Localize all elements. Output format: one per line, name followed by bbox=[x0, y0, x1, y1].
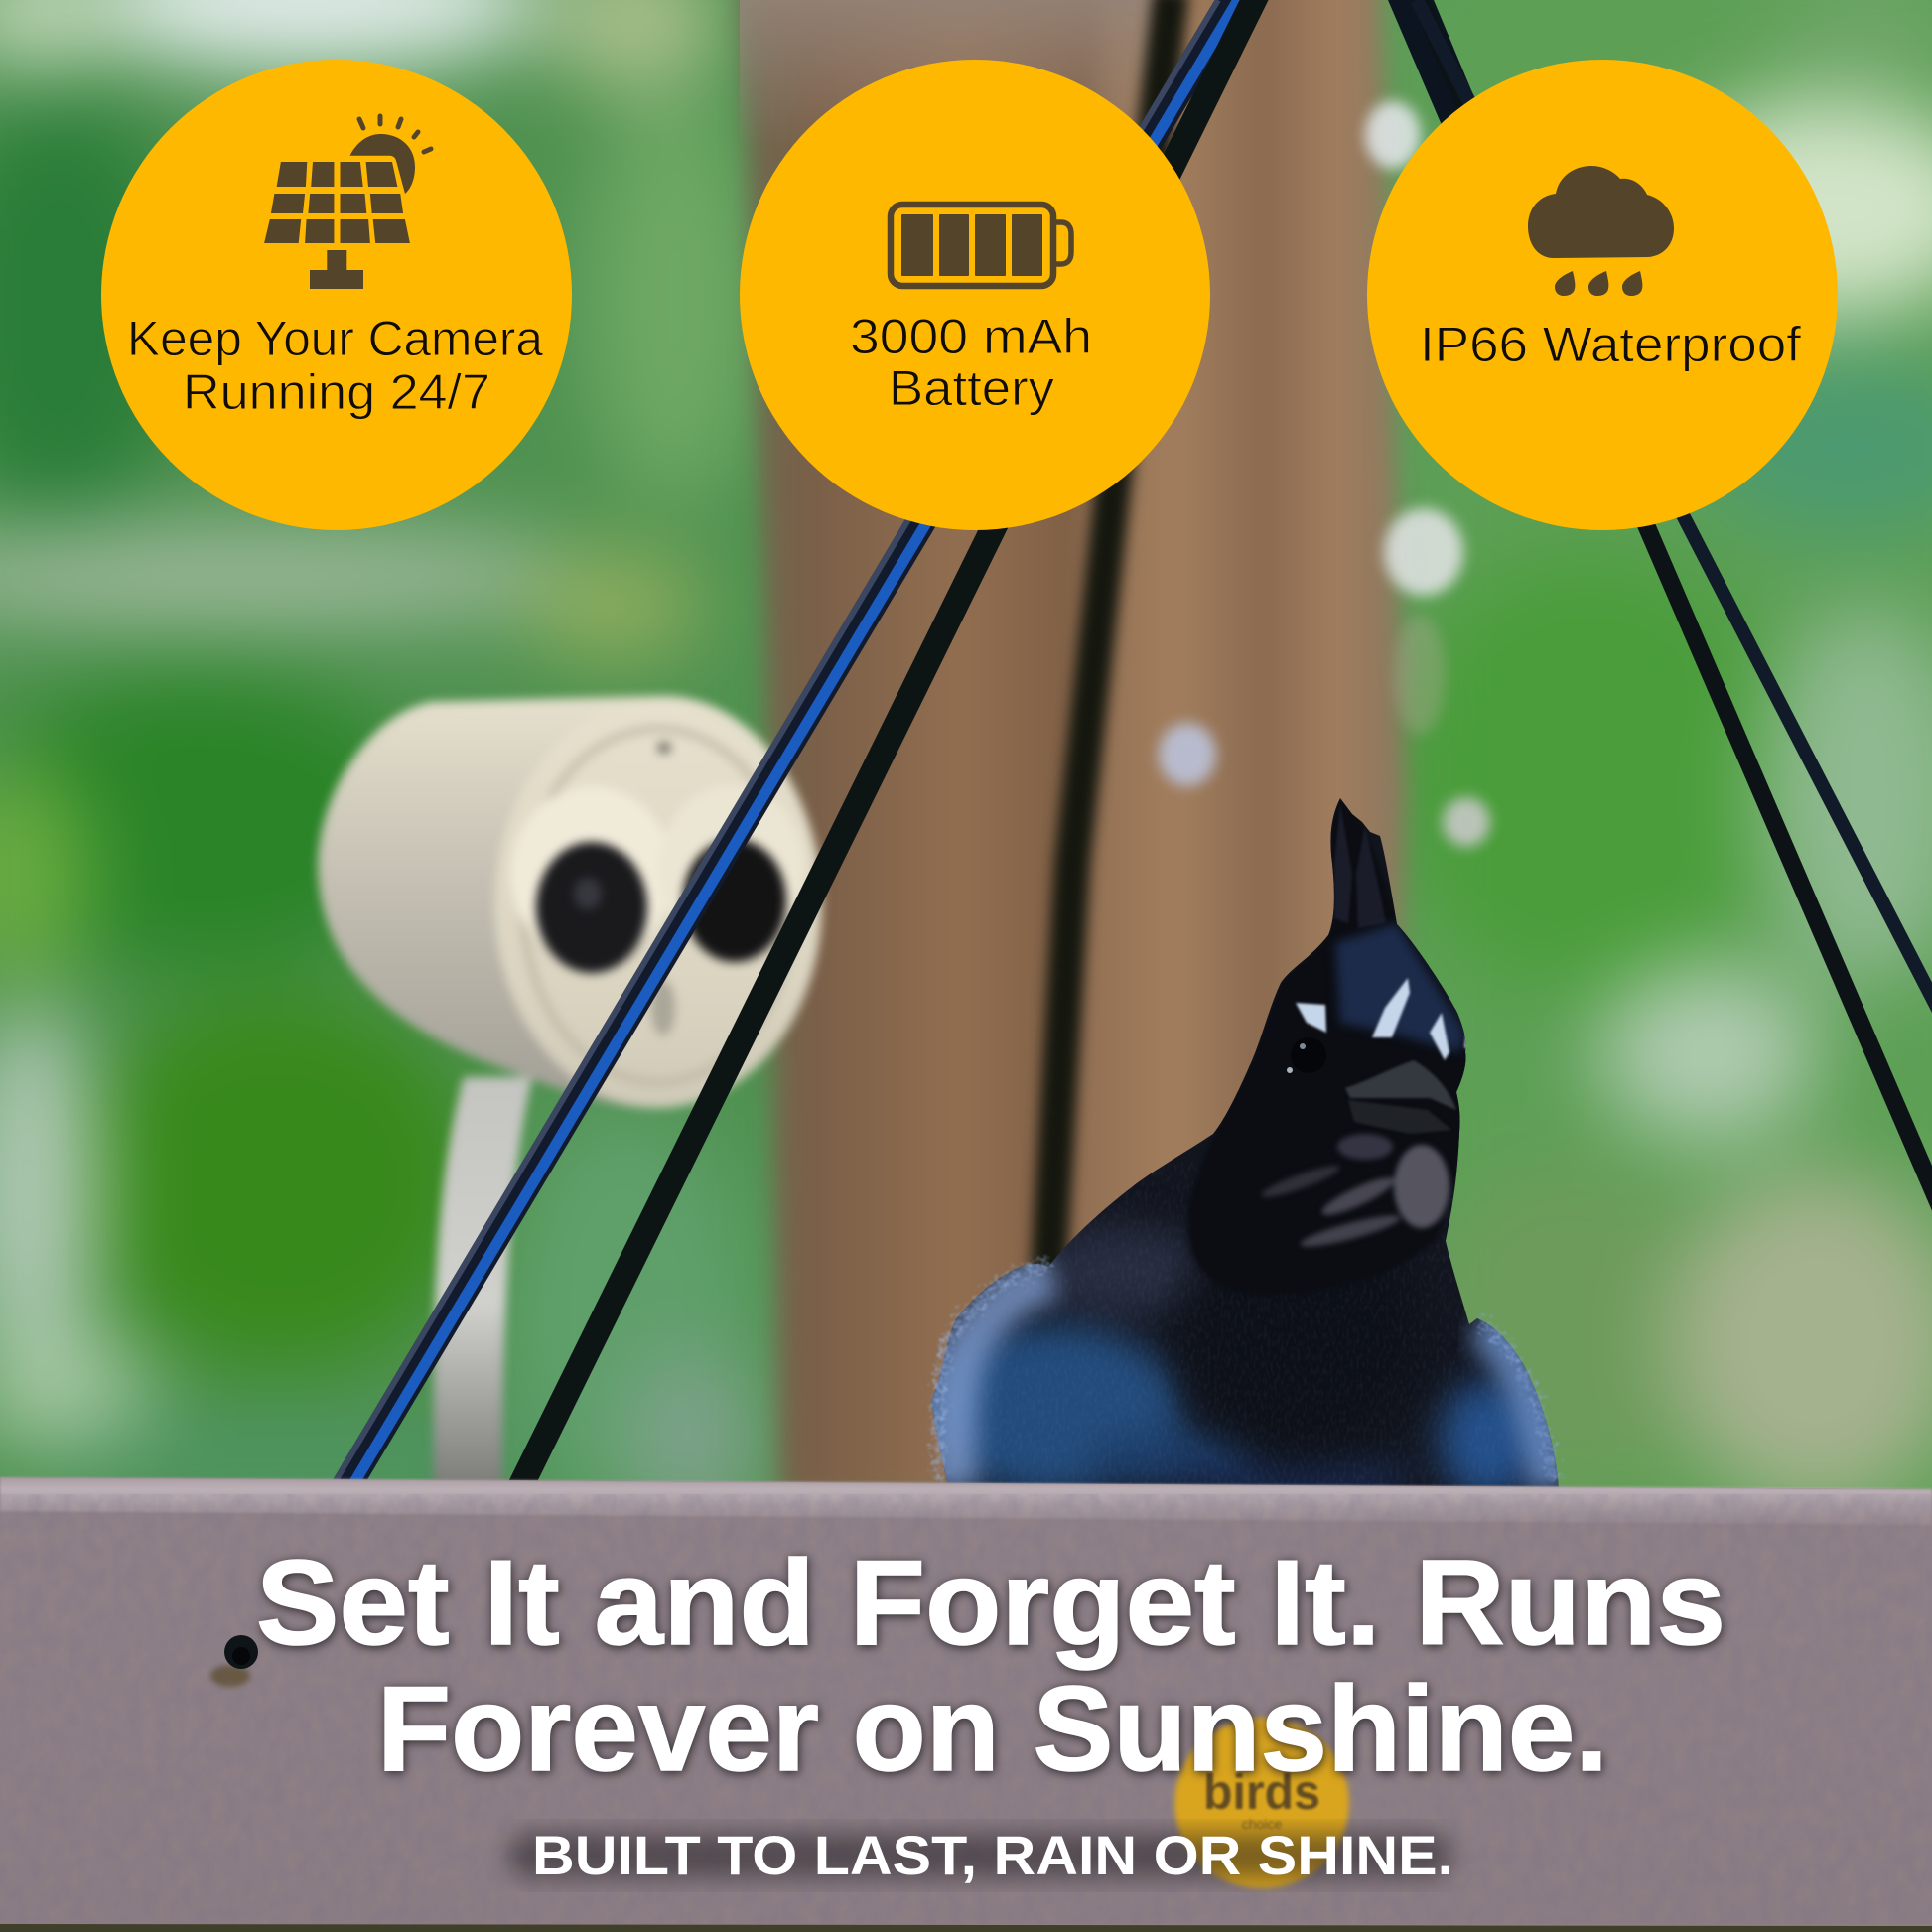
badge: solar bbox=[101, 60, 572, 530]
birds logo sticker: choice bbox=[1242, 1816, 1282, 1832]
subheading: BUILT TO LAST, RAIN OR SHINE. bbox=[532, 1824, 1453, 1886]
bird eye bbox=[1287, 1037, 1326, 1073]
bird left fluff hairs bbox=[938, 1263, 1048, 1481]
camera right lens bbox=[683, 839, 786, 962]
bar noise texture bbox=[0, 1494, 1932, 1924]
bird beak bbox=[1345, 1060, 1456, 1134]
bird chest shadow bbox=[1170, 1258, 1344, 1473]
bird body plumage bbox=[923, 1226, 1539, 1499]
bird right fluff hairs bbox=[1481, 1322, 1555, 1481]
bird forehead marks bbox=[1296, 978, 1471, 1060]
badge text: solar: Keep Your Camera bbox=[127, 311, 543, 366]
birds logo sticker: birds bbox=[1203, 1764, 1320, 1820]
badge text: solar bbox=[127, 311, 543, 420]
badge: battery bbox=[740, 60, 1210, 530]
bird crown bbox=[1335, 923, 1465, 1052]
feeder bar bbox=[0, 1477, 1932, 1932]
badge text: solar: Running 24/7 bbox=[183, 364, 490, 420]
screw bbox=[210, 1635, 258, 1687]
camera lens housings bbox=[510, 786, 673, 961]
camera left lens bbox=[536, 842, 647, 973]
wire: black inner bbox=[514, 0, 1259, 1499]
icon: solar panel with sun bbox=[264, 116, 431, 289]
badge: waterproof bbox=[1367, 60, 1838, 530]
camera face bbox=[494, 699, 822, 1108]
post top fade bbox=[740, 0, 1157, 149]
camera (blurred, in the background) bbox=[318, 696, 822, 1489]
badge text: battery: 3000 mAh bbox=[850, 309, 1092, 364]
bar top highlight bbox=[0, 1477, 1932, 1525]
wire: right thin bbox=[1417, 0, 1932, 1021]
camera stem bbox=[434, 1077, 532, 1489]
bird feather texture bbox=[1036, 1162, 1474, 1485]
wire: blue left bbox=[325, 0, 1238, 1499]
dark gap in post bbox=[1047, 0, 1172, 1291]
badge text: battery bbox=[850, 309, 1092, 416]
wooden post bbox=[740, 0, 1406, 1499]
wire: right top band bbox=[1388, 0, 1479, 139]
headline: Forever on Sunshine. bbox=[377, 1661, 1608, 1796]
bokeh highlights bbox=[1159, 101, 1490, 847]
badge text: waterproof: IP66 Waterproof bbox=[1420, 317, 1801, 372]
icon: battery bbox=[891, 205, 1071, 286]
bird head bbox=[1187, 798, 1468, 1295]
bird throat streaks bbox=[1259, 1134, 1449, 1252]
bird bbox=[913, 784, 1579, 1499]
headline: Set It and Forget It. Runs bbox=[256, 1535, 1725, 1670]
camera nose slot bbox=[651, 980, 675, 1035]
camera mic dot bbox=[657, 742, 671, 754]
headline bbox=[256, 1535, 1725, 1796]
birds logo sticker bbox=[1174, 1718, 1349, 1888]
bird left fluff glow bbox=[952, 1276, 1052, 1489]
bird right fluff glow bbox=[1479, 1325, 1549, 1489]
icon: rain cloud bbox=[1528, 166, 1674, 296]
camera body bbox=[318, 696, 821, 1108]
wire: right outer thick bbox=[1420, 0, 1932, 1211]
bird crest bbox=[1334, 804, 1386, 928]
bar face bbox=[0, 1477, 1932, 1926]
badge text: battery: Battery bbox=[889, 360, 1054, 416]
